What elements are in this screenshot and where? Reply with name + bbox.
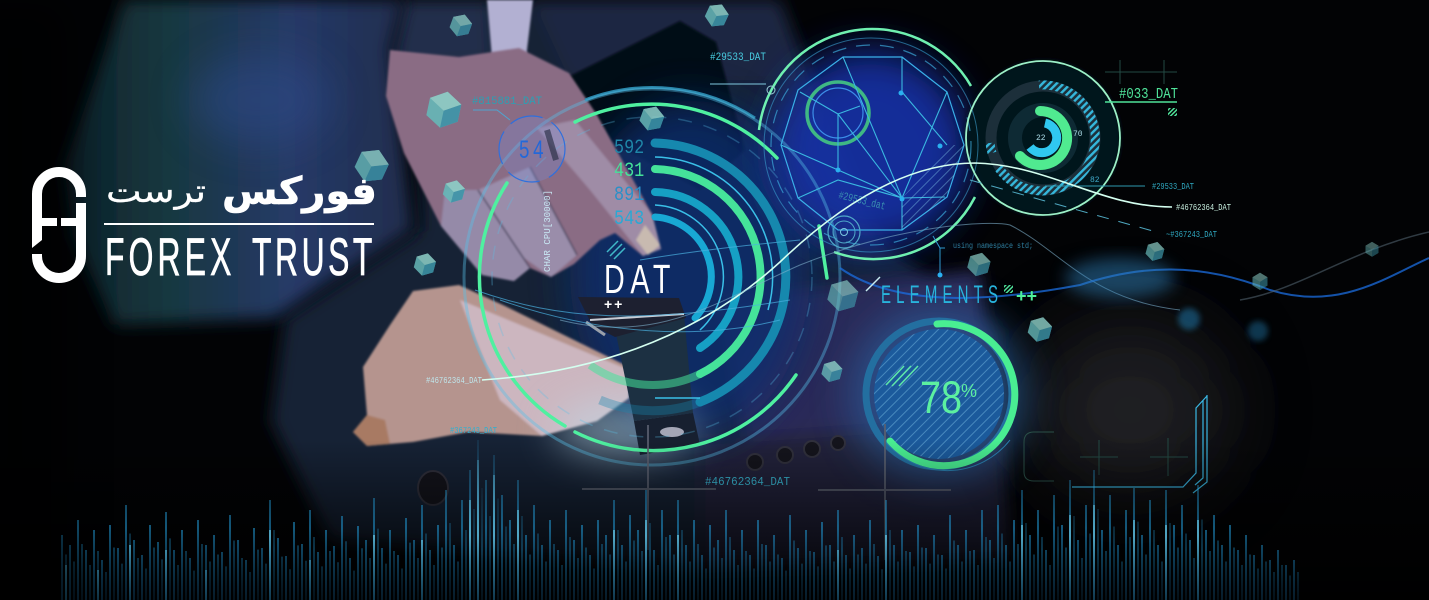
small data labels — [426, 52, 1231, 489]
DAT label: ++ — [604, 296, 624, 312]
dial numbers: 592 — [614, 137, 644, 159]
floating cubes — [351, 0, 1379, 384]
small data labels: #815881_DAT — [472, 96, 542, 108]
logo English wordmark — [105, 228, 376, 287]
small data labels: #29533_dat — [837, 190, 887, 213]
small data labels: #367243_DAT — [450, 426, 497, 436]
phone — [558, 21, 745, 190]
logo mark — [32, 172, 81, 278]
white haze around the wrist — [555, 400, 695, 460]
logo: Forex Trust — [32, 169, 377, 287]
ELEMENTS heading — [866, 277, 1037, 309]
dial numbers — [614, 137, 644, 230]
dial numbers: 431 — [614, 160, 644, 182]
glow behind HUD circles — [570, 50, 1121, 482]
lower hand — [353, 285, 629, 446]
small gauge 54 — [473, 110, 565, 182]
geometry circle — [710, 29, 978, 278]
donut circle: 70 — [1073, 130, 1083, 139]
crosshairs and corner brackets — [582, 395, 1207, 560]
small data labels: #46762364_DAT — [705, 475, 790, 489]
dial numbers: 543 — [614, 208, 644, 230]
DAT label: DAT — [604, 257, 676, 302]
donut circle: 22 — [1036, 134, 1046, 143]
small data labels: ~#367243_DAT — [1166, 230, 1217, 240]
main HUD dial — [464, 88, 840, 465]
suit torso — [271, 0, 1010, 570]
outer green arcs — [479, 104, 796, 451]
78 percent gauge: % — [961, 381, 977, 401]
logo Arabic wordmark — [106, 169, 377, 213]
concentric data arcs — [655, 143, 786, 402]
logo Arabic wordmark: ترست — [106, 172, 206, 210]
small data labels: #29533_DAT — [710, 52, 766, 64]
bottom fade — [0, 440, 1429, 600]
suit buttons — [418, 436, 845, 505]
thin cyan rings — [585, 88, 755, 118]
donut circle — [966, 60, 1177, 215]
78 percent gauge: 78 — [920, 372, 962, 423]
small gauge 54: 54 — [519, 135, 547, 164]
ELEMENTS heading: ELEMENTS — [881, 281, 1003, 309]
shirt — [487, 0, 533, 58]
upper hand — [386, 48, 661, 281]
small data labels: #46762364_DAT — [426, 376, 482, 386]
smart watch — [578, 297, 700, 455]
small data labels: #29533_DAT — [1152, 182, 1194, 192]
suit sleeve — [64, 0, 413, 325]
equalizer bars — [62, 440, 1298, 600]
small data labels: #033_DAT — [1119, 86, 1178, 103]
data curves — [482, 163, 1429, 380]
logo English wordmark: FOREX — [105, 228, 236, 287]
left edge vignette — [0, 0, 70, 600]
78 percent gauge — [866, 321, 1015, 471]
dial numbers: 891 — [614, 184, 644, 206]
donut circle: 82 — [1090, 176, 1100, 185]
small data labels: using namespace std; — [953, 241, 1033, 251]
small data labels: CHAR CPU[30000] — [543, 190, 553, 272]
grey haze at right — [1030, 320, 1230, 500]
logo Arabic wordmark: فوركس — [222, 169, 377, 213]
logo English wordmark: TRUST — [252, 228, 376, 287]
logo rule — [104, 223, 374, 225]
small data labels: #46762364_DAT — [1176, 203, 1231, 213]
DAT label — [604, 241, 676, 312]
ELEMENTS heading: ++ — [1016, 286, 1037, 306]
